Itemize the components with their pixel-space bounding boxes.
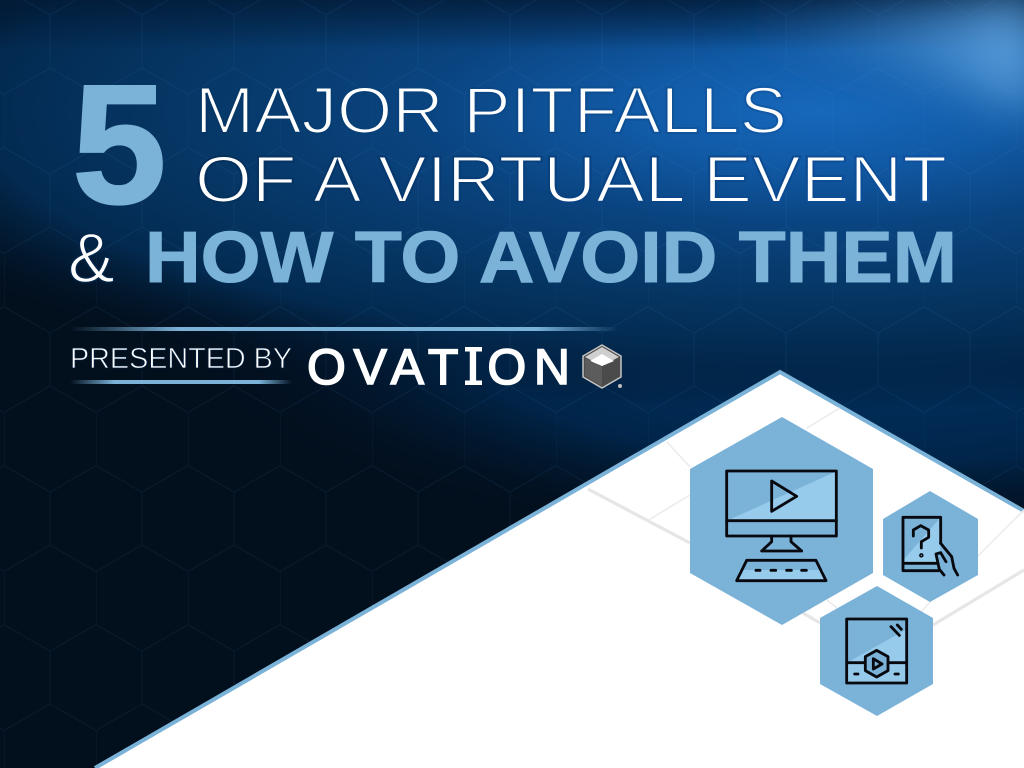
- title line three: HOW TO AVOID THEM: [145, 218, 957, 298]
- presented by label: PRESENTED BY: [70, 343, 292, 375]
- icon: Ovation cube: [583, 345, 622, 388]
- Ovation wordmark: OVATION: [307, 339, 570, 395]
- title: [68, 50, 957, 298]
- top rule: [70, 327, 618, 331]
- big numeral 5: 5: [72, 50, 167, 240]
- bottom rule: [70, 380, 292, 384]
- icon hexagons: [690, 417, 978, 716]
- icon: video player screen: [820, 586, 933, 716]
- presented by block: [70, 327, 622, 395]
- icon: tablet with question mark and hand: [883, 491, 978, 602]
- white triangular panel: [95, 372, 1024, 768]
- icon: desktop computer with play button: [690, 417, 873, 625]
- title line two: OF A VIRTUAL EVENT: [195, 142, 947, 216]
- ampersand: &: [68, 219, 115, 297]
- title line one: MAJOR PITFALLS: [195, 73, 787, 147]
